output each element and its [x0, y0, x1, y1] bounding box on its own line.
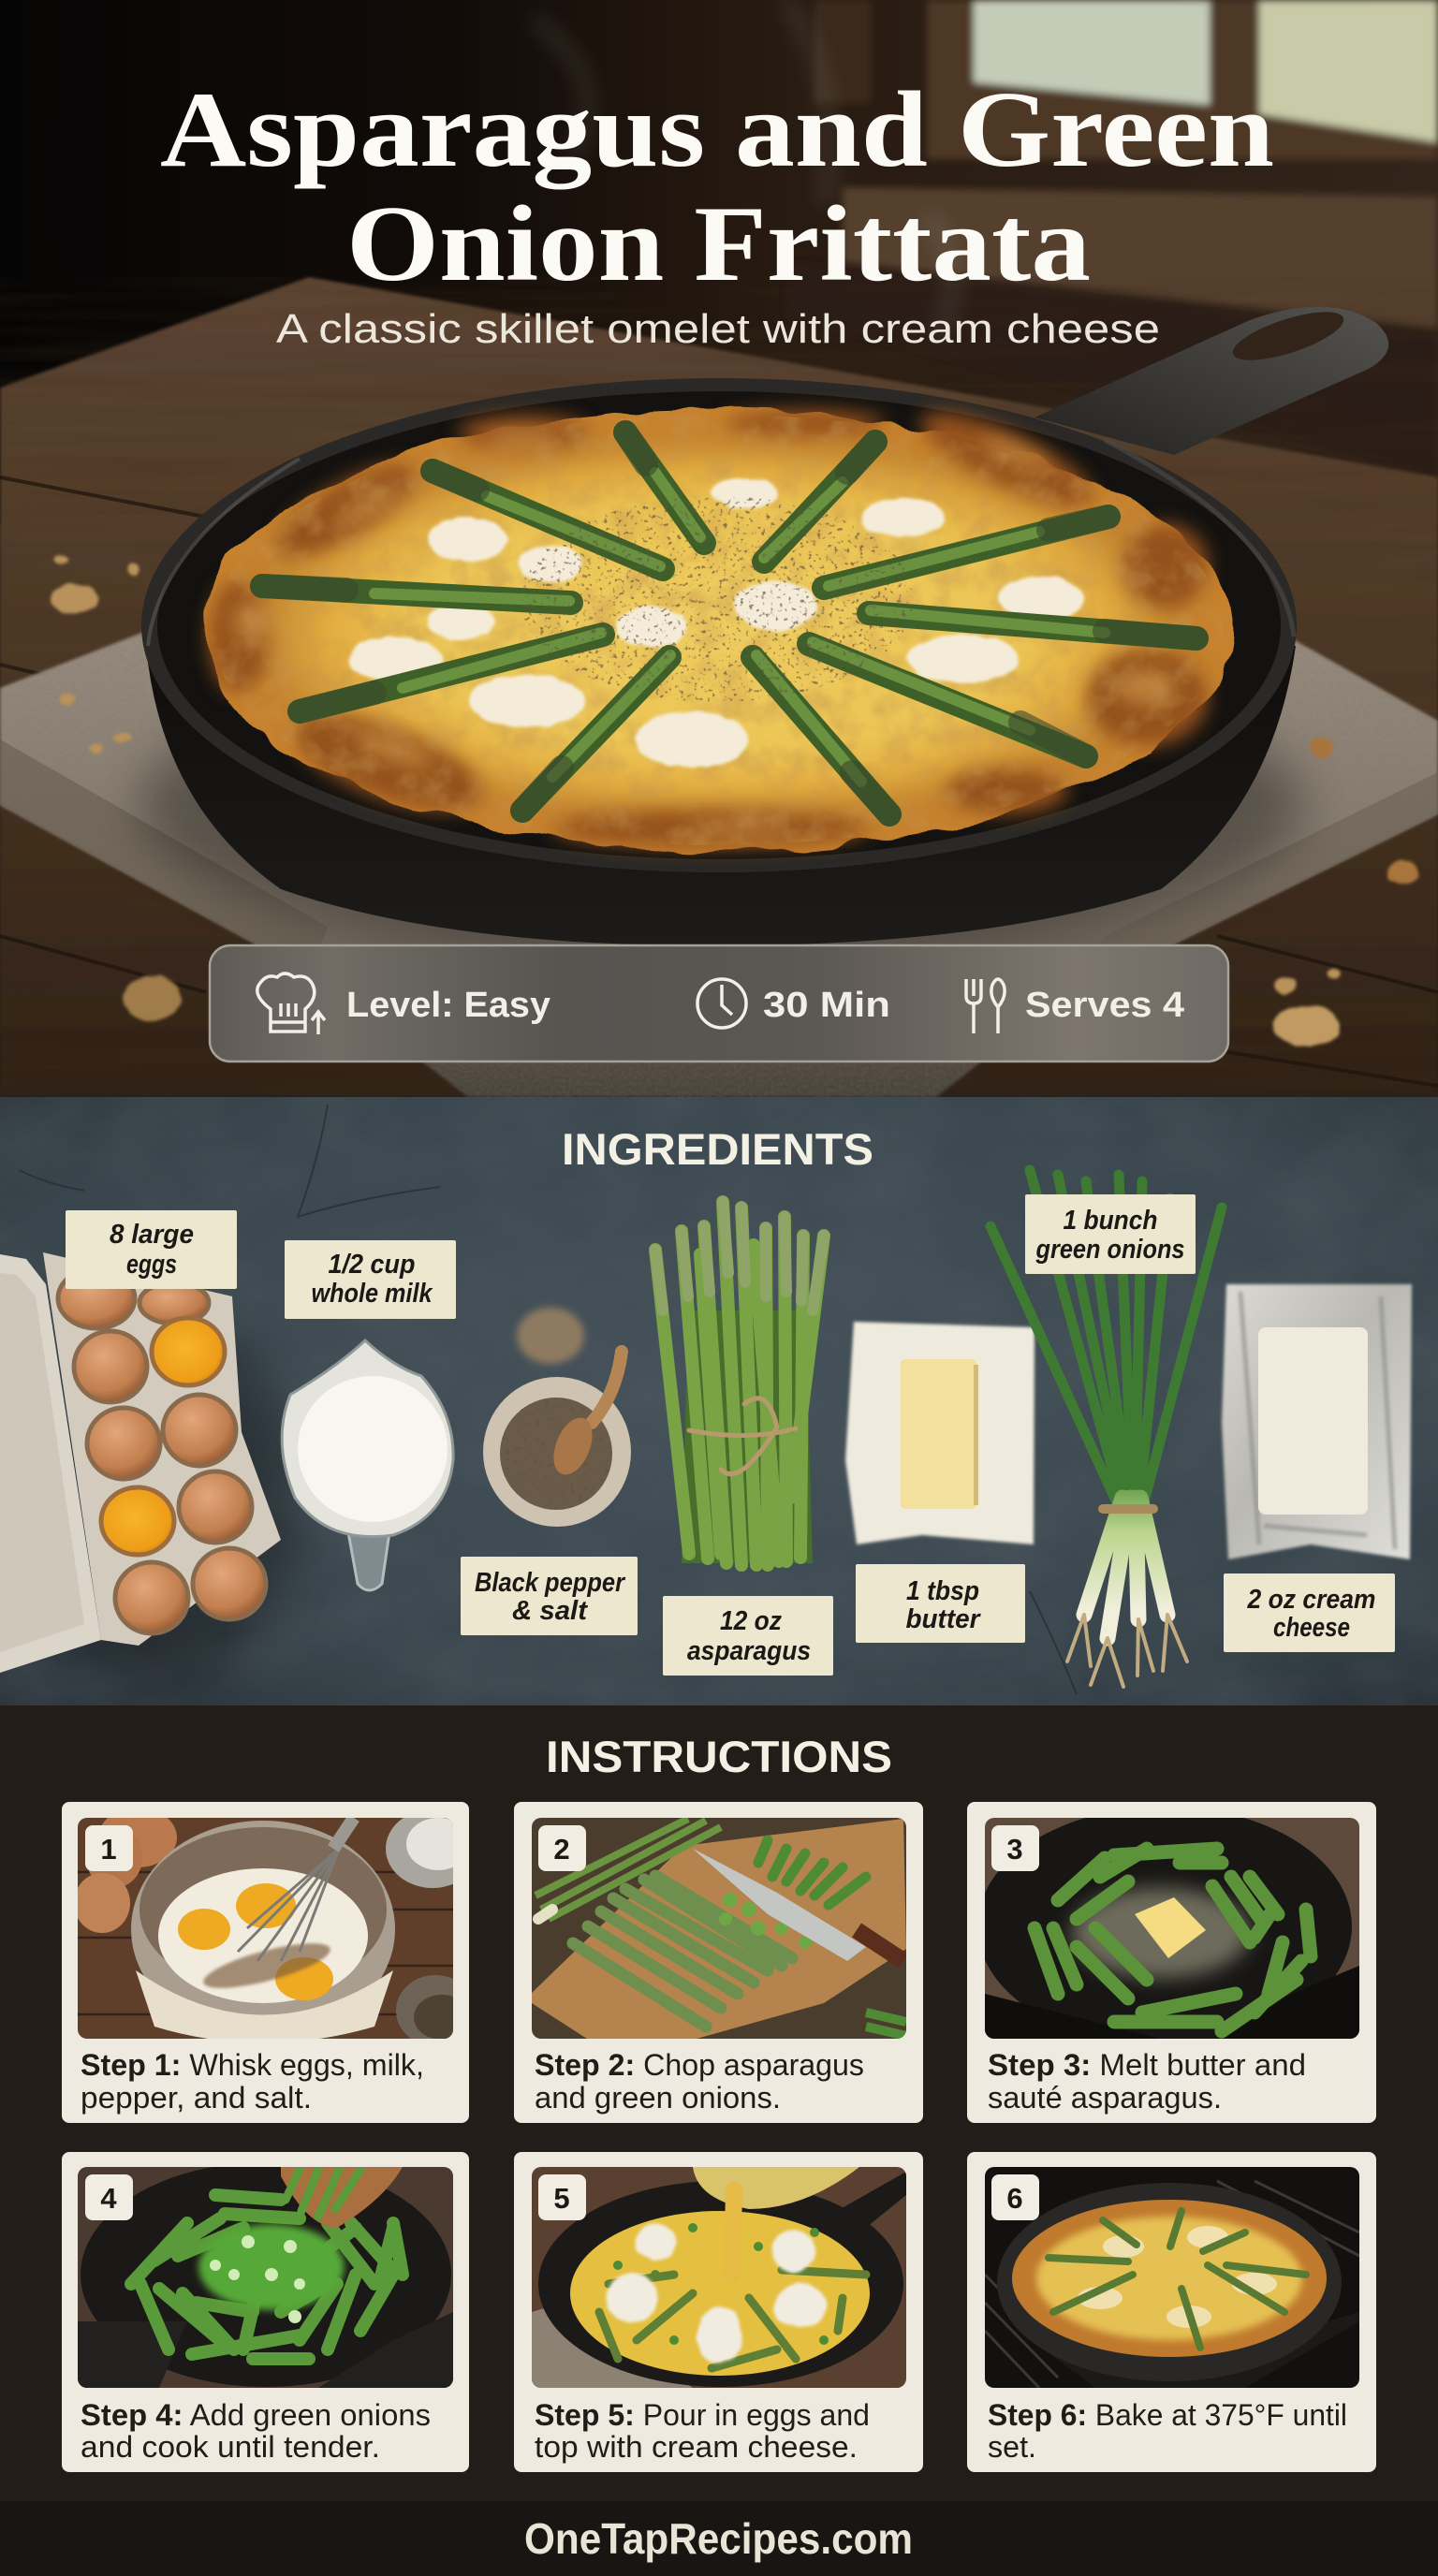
label: eggs: 8 large — [110, 1220, 194, 1250]
instructions heading: INSTRUCTIONS — [546, 1732, 892, 1781]
label: asparagus — [663, 1596, 833, 1676]
step 6 text: Step 6: Bake at 375°F until — [988, 2398, 1347, 2432]
number badge 6 — [991, 2174, 1039, 2220]
step 6 card — [967, 2152, 1376, 2472]
step 2 image — [532, 1818, 906, 2039]
step 4 card — [62, 2152, 469, 2472]
step 2 text: Step 2: Chop asparagus — [535, 2048, 864, 2082]
step 3 image — [977, 1807, 1359, 2046]
label: green onions: 1 bunch — [1064, 1206, 1157, 1236]
hero photo panel — [0, 0, 1438, 1097]
step 5 image — [532, 2167, 906, 2388]
skillet handle — [1034, 302, 1388, 455]
step 1 card — [62, 1802, 479, 2123]
label: cream cheese: cheese — [1273, 1613, 1350, 1643]
number badge 1: 1 — [100, 1833, 117, 1866]
step 6 text — [988, 2398, 1347, 2464]
browned crust — [209, 395, 1225, 847]
step 1 text — [81, 2048, 424, 2115]
step 5 card — [514, 2152, 923, 2472]
step 2 text: and green onions. — [535, 2081, 781, 2115]
black pepper and salt bowl — [483, 1308, 631, 1527]
step 4 image — [78, 2162, 453, 2388]
step 6 text: set. — [988, 2430, 1036, 2464]
steam — [534, 0, 953, 337]
label: butter: 1 tbsp — [906, 1576, 979, 1606]
number badge 3 — [991, 1825, 1039, 1871]
linen cloth — [0, 618, 1438, 1097]
skillet body — [146, 646, 1296, 945]
skillet — [141, 302, 1388, 945]
label: pepper and salt: Black pepper — [475, 1568, 625, 1598]
carton tray — [43, 1252, 281, 1646]
number badge 1 — [85, 1825, 133, 1871]
carton lid — [0, 1254, 101, 1673]
step 4 text — [81, 2398, 431, 2464]
label: butter — [856, 1564, 1025, 1643]
label: pepper and salt: & salt — [512, 1596, 588, 1626]
dark room background — [0, 0, 1438, 524]
black pepper — [521, 496, 914, 702]
footer: OneTapRecipes.com — [524, 2514, 913, 2563]
icon: chef hat — [257, 973, 325, 1034]
subtitle: A classic skillet omelet with cream cheese — [276, 306, 1160, 352]
number badge 4: 4 — [100, 2182, 117, 2215]
label: green onions — [1025, 1194, 1196, 1274]
cream cheese — [1222, 1284, 1412, 1559]
icon: clock — [697, 979, 746, 1028]
number badge 2 — [538, 1825, 586, 1871]
servings label: Serves 4 — [1025, 986, 1184, 1025]
label: milk: whole milk — [311, 1279, 433, 1309]
step 5 text: Step 5: Pour in eggs and — [535, 2398, 870, 2432]
cheese dollops — [348, 478, 1084, 768]
info bar — [210, 945, 1228, 1061]
step 3 text — [988, 2048, 1306, 2115]
step 1 image — [74, 1808, 479, 2046]
step 2 text — [535, 2048, 864, 2115]
level label: Level: Easy — [346, 986, 550, 1025]
number badge 6: 6 — [1006, 2182, 1023, 2215]
label: asparagus: 12 oz — [720, 1606, 782, 1636]
label: cream cheese: 2 oz cream — [1247, 1585, 1376, 1615]
crust highlights — [234, 431, 1177, 835]
pan shadow — [125, 735, 1316, 944]
milk jug — [282, 1340, 453, 1590]
title — [160, 70, 1274, 304]
crumbs — [51, 555, 1419, 1046]
number badge 2: 2 — [553, 1833, 570, 1866]
instructions panel — [0, 1705, 1438, 2501]
ingredients heading: INGREDIENTS — [562, 1124, 873, 1174]
step 3 text: Step 3: Melt butter and — [988, 2048, 1306, 2082]
step 3 card — [967, 1802, 1376, 2123]
step 6 image — [985, 2167, 1359, 2388]
slate background — [0, 1097, 1438, 1705]
icon: utensils — [966, 979, 1005, 1033]
step 1 text: pepper, and salt. — [81, 2081, 312, 2115]
label: pepper and salt — [461, 1557, 638, 1635]
eggs — [58, 1268, 266, 1633]
step 1 text: Step 1: Whisk eggs, milk, — [81, 2048, 424, 2082]
step 2 card — [514, 1802, 923, 2123]
time label: 30 Min — [763, 986, 890, 1025]
label: butter: butter — [906, 1604, 981, 1634]
step 4 text: and cook until tender. — [81, 2430, 380, 2464]
number badge 5 — [538, 2174, 586, 2220]
label: cream cheese — [1224, 1573, 1395, 1652]
window — [786, 0, 1438, 477]
label: green onions: green onions — [1035, 1235, 1185, 1265]
step 4 text: Step 4: Add green onions — [81, 2398, 431, 2432]
number badge 3: 3 — [1006, 1833, 1023, 1866]
label: eggs — [66, 1210, 237, 1289]
title: Asparagus and Green — [160, 70, 1274, 190]
number badge 4 — [85, 2174, 133, 2220]
green onions — [990, 1170, 1222, 1687]
title: Onion Frittata — [346, 184, 1091, 304]
wooden table — [0, 277, 1438, 1097]
step 3 text: sauté asparagus. — [988, 2081, 1222, 2115]
open yolks — [101, 1318, 225, 1555]
number badge 5: 5 — [553, 2182, 570, 2215]
ingredients panel — [0, 1097, 1438, 1705]
frittata — [204, 395, 1230, 851]
label: milk: 1/2 cup — [328, 1250, 416, 1280]
step 5 text: top with cream cheese. — [535, 2430, 858, 2464]
asparagus spears — [262, 432, 1196, 814]
asparagus bundle — [655, 1202, 824, 1565]
footer — [0, 2501, 1438, 2576]
label: eggs: eggs — [126, 1250, 177, 1280]
egg carton — [0, 1252, 300, 1685]
spear tips — [262, 432, 1196, 814]
mottled texture — [212, 415, 1223, 845]
step 5 text — [535, 2398, 870, 2464]
label: milk — [285, 1240, 456, 1319]
butter — [845, 1322, 1034, 1544]
label: asparagus: asparagus — [687, 1636, 811, 1666]
